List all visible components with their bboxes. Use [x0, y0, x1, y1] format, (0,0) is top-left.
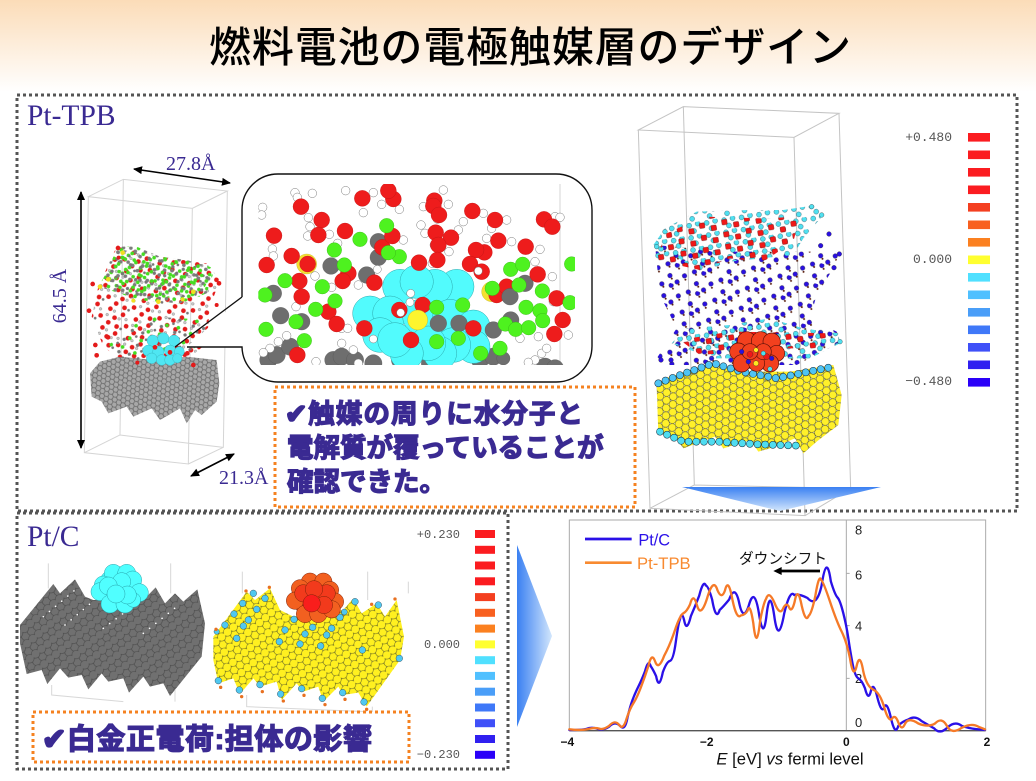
dimension arrow: depth 21.3 Å: [191, 454, 269, 489]
y axis labels: 6: [855, 567, 862, 582]
text box: catalyst observation: 確認できた。: [287, 467, 446, 497]
heading: Pt-TPB: Pt-TPB: [27, 100, 116, 132]
Pt cluster, charge coloured: [730, 332, 785, 372]
dimension arrow: depth 21.3 Å: 21.3Å: [219, 467, 269, 489]
dimension arrow: height 64.5 Å: 64.5 Å: [49, 268, 71, 323]
annotation: downshift: ダウンシフト: [739, 550, 827, 567]
legend: Pt/C: Pt/C: [638, 532, 670, 550]
x axis labels: 2: [984, 735, 991, 749]
text box: support effect: [33, 712, 409, 762]
legend: Pt/C: [585, 532, 670, 550]
title: 燃料電池の電極触媒層のデザイン: [209, 24, 851, 71]
line: Pt/C: [569, 568, 985, 731]
panel: Pt-TPB: [17, 95, 1017, 516]
x axis labels: −4: [560, 735, 574, 749]
Pt cluster: [286, 573, 344, 623]
molecular model: charge distribution: [638, 107, 851, 516]
y axis labels: 2: [855, 671, 862, 686]
text box: support effect: ✔白金正電荷:担体の影響: [42, 723, 372, 756]
legend: charge scale ±0.480: −0.480: [905, 374, 952, 389]
legend: Pt-TPB: [585, 554, 691, 573]
panel: Pt/C: [17, 513, 508, 769]
callout: zoomed view of catalyst surroundings: [175, 174, 592, 382]
legend: charge scale ±0.230: 0.000: [424, 638, 460, 652]
y axis labels: 4: [855, 618, 862, 633]
legend: charge scale ±0.480: 0.000: [913, 252, 952, 267]
text box: catalyst observation: ✔触媒の周りに水分子と: [285, 399, 583, 429]
molecular model: Pt on carbon support: [20, 563, 205, 702]
legend: Pt-TPB: Pt-TPB: [637, 554, 691, 573]
background gradient band: [0, 0, 1036, 92]
dimension arrow: width 27.8 Å: [134, 153, 230, 183]
x axis labels: [560, 735, 991, 749]
text box: catalyst observation: 電解質が覆っていることが: [287, 433, 604, 463]
heading: Pt/C: Pt/C: [27, 521, 79, 553]
legend: charge scale ±0.480: [905, 130, 990, 389]
Pt cluster: [91, 564, 148, 613]
x axis labels: 0: [843, 735, 850, 749]
molecular model: simulation cell: [84, 179, 227, 464]
legend: charge scale ±0.230: [417, 528, 495, 762]
line: Pt-TPB: [569, 578, 985, 731]
Pt cluster: [143, 333, 184, 365]
y axis labels: [855, 523, 862, 730]
Pt cluster in inset: [353, 265, 490, 370]
x axis labels: −2: [700, 735, 714, 749]
chart: density of states: [560, 520, 991, 768]
y axis labels: 0: [855, 715, 862, 730]
molecular model: charge coloured Pt/C: [213, 572, 408, 717]
legend: charge scale ±0.230: +0.230: [417, 528, 460, 542]
text box: catalyst observation: [275, 387, 635, 507]
arrow: right to chart: [517, 545, 552, 727]
x axis title: E [eV] vs fermi level: [716, 749, 864, 768]
arrow: down to chart: [682, 487, 881, 511]
legend: charge scale ±0.230: −0.230: [417, 748, 460, 762]
y axis labels: 8: [855, 523, 862, 538]
legend: charge scale ±0.480: +0.480: [905, 130, 952, 145]
dimension arrow: width 27.8 Å: 27.8Å: [166, 153, 216, 175]
annotation: downshift: [739, 550, 827, 575]
